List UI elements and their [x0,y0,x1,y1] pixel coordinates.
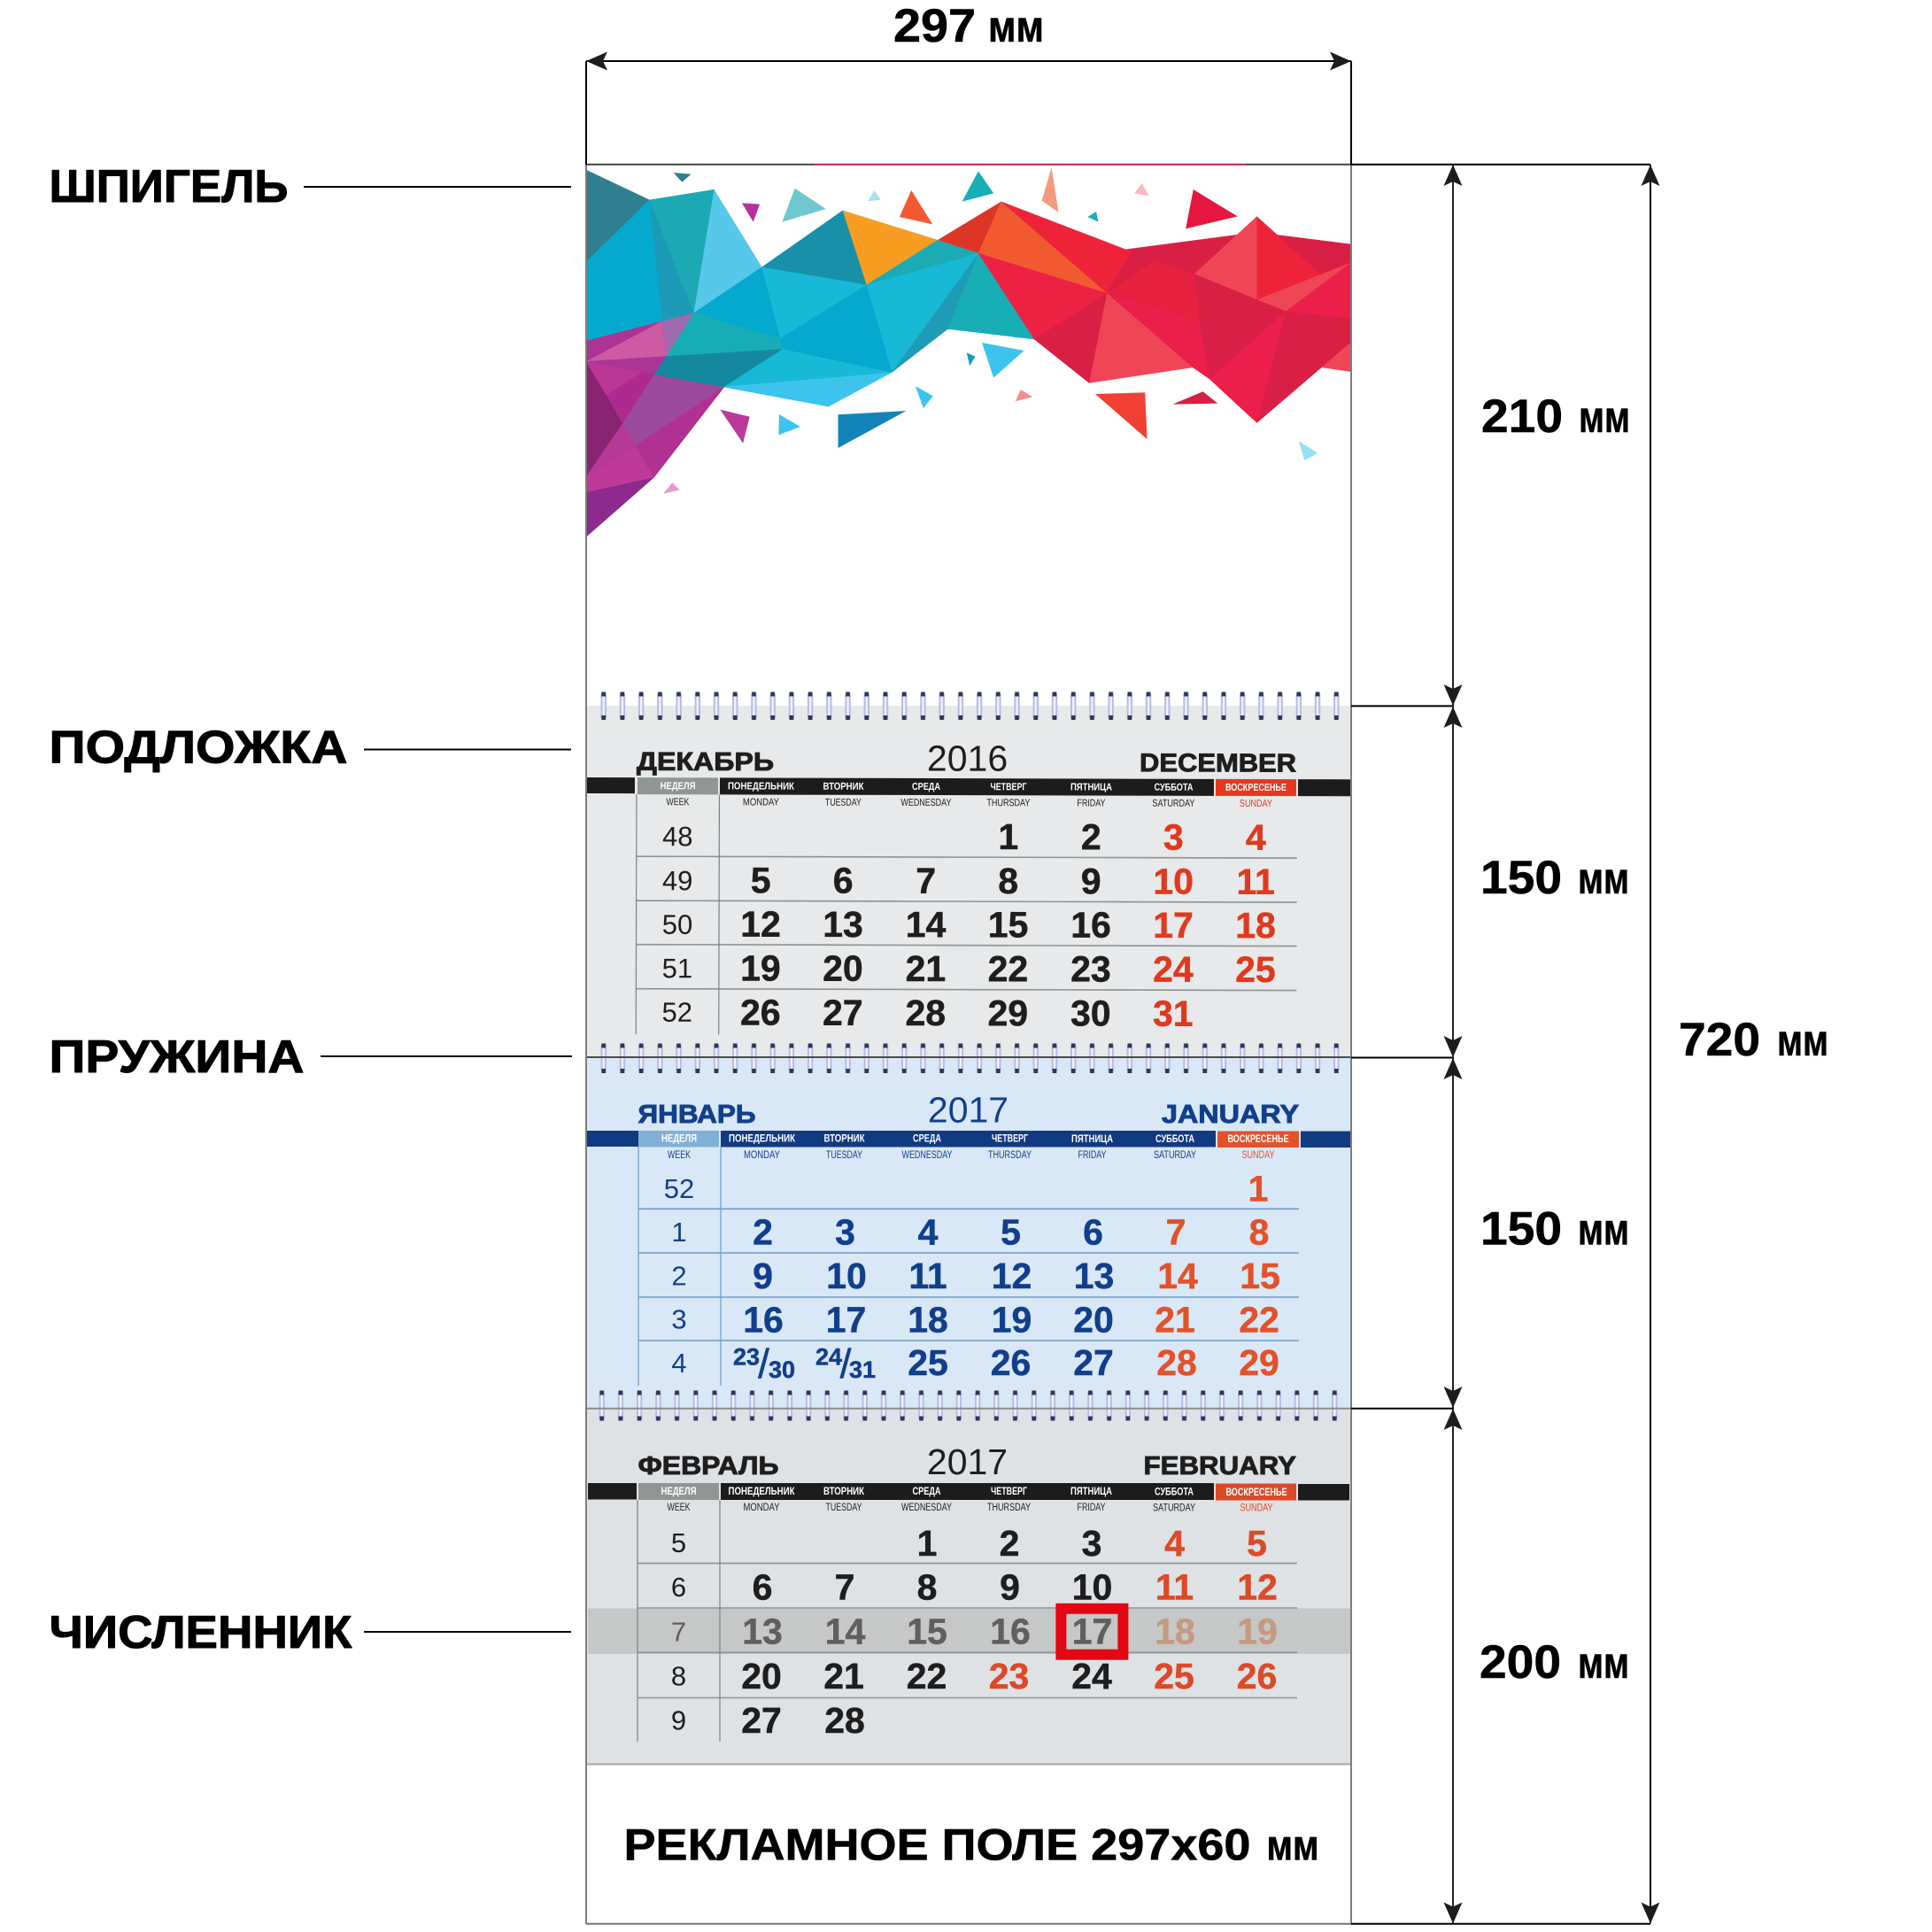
December content: 2 [1081,816,1101,857]
panel: February calendar [586,1409,1351,1766]
label: calendar block: ЧИСЛЕННИК [50,1607,352,1658]
panel: January calendar: ПОНЕДЕЛЬНИК [729,1133,796,1144]
panel: January calendar: 1 [1248,1169,1268,1209]
panel: January calendar: WEEK [668,1150,691,1161]
dimension arrow: 200 mm [1443,1409,1629,1923]
panel: February calendar: THURSDAY [987,1503,1031,1513]
December content: 6 [833,861,854,901]
panel: January calendar: / [840,1341,852,1387]
panel: January calendar: 22 [1239,1299,1279,1340]
December content: 2016 [927,738,1008,779]
December content: WEDNESDAY [900,798,952,808]
panel: January calendar: 6 [1083,1212,1103,1253]
spiral binding: bottom [592,1390,1345,1420]
label: spring: ПРУЖИНА [50,1032,305,1083]
panel: January calendar: ЯНВАРЬ [638,1101,756,1129]
panel: February calendar: ЧЕТВЕРГ [991,1487,1027,1497]
December content: ЧЕТВЕРГ [990,782,1027,792]
panel: February calendar: MONDAY [744,1503,780,1513]
spiral binding: top [594,692,1347,720]
December content: 23 [1070,948,1111,990]
panel: January calendar: 4 [671,1348,687,1379]
panel: February calendar: ПЯТНИЦА [1070,1487,1112,1497]
panel: January calendar: 24 [815,1344,842,1371]
dimension arrow: 200 mm: мм [1578,1638,1629,1688]
panel: January calendar: 18 [908,1299,948,1340]
December content: SUNDAY [1240,799,1272,809]
December content: 18 [1235,905,1276,946]
dimension arrow: 150 mm lower: 150 [1480,1202,1562,1256]
panel: January calendar: FRIDAY [1078,1150,1107,1161]
December content: 48 [662,821,693,852]
December content: 26 [740,992,781,1033]
panel: January calendar: JANUARY [1162,1101,1299,1129]
December content: 12 [740,904,781,945]
December content: 24 [1153,949,1194,990]
panel: February calendar: 5 [1247,1523,1267,1564]
panel: January calendar: WEDNESDAY [901,1150,953,1161]
December content: MONDAY [743,797,779,808]
panel: January calendar: 15 [1240,1256,1280,1296]
December content: 13 [823,904,863,945]
panel: February calendar: TUESDAY [825,1503,862,1513]
dimension arrow: 150 mm upper: мм [1578,854,1629,903]
panel: January calendar: 3 [671,1303,687,1335]
spiral binding: middle [594,1043,1347,1073]
label: spigel: ШПИГЕЛЬ [50,161,289,213]
panel: February calendar: 17 [1072,1611,1112,1652]
December content: 11 [1236,862,1275,902]
December content: SATURDAY [1152,799,1195,809]
panel: February calendar: ПОНЕДЕЛЬНИК [728,1487,795,1497]
panel: January calendar: 26 [991,1342,1031,1383]
December content: ПЯТНИЦА [1070,782,1112,793]
panel: February calendar: 21 [823,1656,864,1696]
December content: 3 [1163,817,1184,858]
panel: February calendar: ВТОРНИК [823,1487,865,1497]
December content: FRIDAY [1077,798,1106,809]
panel: January calendar: 14 [1157,1256,1198,1296]
dimension arrow: 720 mm total [1642,165,1828,1923]
dimension arrow: 210 mm: 210 [1481,390,1563,443]
December content: ВТОРНИК [823,782,864,792]
panel: February calendar: 10 [1072,1567,1112,1608]
panel: February calendar: 16 [990,1611,1031,1652]
December content: 31 [1153,993,1194,1034]
panel: February calendar: 3 [1082,1523,1101,1564]
right dimension tick lines [1351,165,1650,1924]
panel: January calendar: 30 [769,1356,795,1383]
panel: February calendar: 8 [671,1661,686,1691]
December content: 4 [1246,817,1266,858]
panel: February calendar: 6 [671,1572,686,1603]
panel: January calendar: ВОСКРЕСЕНЬЕ [1227,1134,1289,1145]
December content: 52 [662,997,692,1028]
December content: 8 [998,861,1018,901]
December content [585,738,1351,1036]
label: backing: ПОДЛОЖКА [50,723,347,774]
dimension arrow: 150 mm upper [1443,706,1629,1057]
December content: 50 [662,909,692,940]
dimension arrow: 200 mm: 200 [1480,1636,1561,1689]
top dimension: 297 mm [586,0,1351,165]
advertising field text: мм [1266,1822,1319,1870]
panel: February calendar: 24 [1071,1656,1112,1696]
December content: ДЕКАБРЬ [637,748,774,777]
dimension arrow: 720 mm total: мм [1777,1016,1828,1065]
dimension arrow: 150 mm lower [1443,1057,1629,1409]
December content: 1 [998,816,1018,857]
panel: January calendar: 17 [826,1299,866,1340]
panel: January calendar: MONDAY [744,1150,780,1161]
date marker: red frame on 17 [1061,1609,1123,1655]
panel: February calendar: FEBRUARY [1144,1452,1296,1480]
panel: January calendar: 52 [664,1173,694,1204]
panel: February calendar: 7 [671,1617,686,1647]
panel: January calendar: 4 [918,1212,939,1253]
December content: 27 [823,993,863,1033]
panel: January calendar: 8 [1249,1212,1269,1253]
December content: 17 [1153,905,1194,946]
panel: January calendar: НЕДЕЛЯ [661,1133,697,1144]
panel: January calendar: 16 [743,1299,784,1340]
panel: January calendar: TUESDAY [826,1150,862,1161]
panel: spigel header with polygon art [586,165,1351,706]
panel: February calendar: 15 [907,1611,947,1652]
dimension arrow: 720 mm total: 720 [1679,1014,1760,1066]
panel: January calendar: 29 [1239,1342,1279,1383]
panel: January calendar: ЧЕТВЕРГ [992,1133,1028,1144]
panel: January calendar: THURSDAY [988,1150,1032,1161]
panel: January calendar: 2 [671,1261,687,1291]
panel: February calendar: 20 [741,1656,782,1696]
top dimension: 297 mm: 297 [893,0,976,52]
panel: January calendar: 23 [733,1344,760,1371]
top dimension: 297 mm: мм [988,2,1044,51]
December content: 19 [740,947,781,989]
panel: January calendar: 12 [992,1256,1032,1296]
panel: January calendar: ПЯТНИЦА [1071,1134,1113,1145]
panel: February calendar: 27 [741,1700,782,1741]
panel: January calendar: 20 [1073,1299,1114,1340]
December content: 51 [662,953,692,984]
panel: February calendar: 6 [753,1567,772,1608]
panel: February calendar: 22 [907,1656,947,1696]
December content: 29 [987,993,1028,1033]
advertising field text: РЕКЛАМНОЕ ПОЛЕ 297х60 [623,1820,1250,1870]
panel: January calendar: ВТОРНИК [823,1133,865,1144]
panel: February calendar: 26 [1237,1656,1277,1696]
December content: 16 [1070,905,1111,946]
dimension arrow: 150 mm upper: 150 [1480,852,1562,904]
panel: January calendar: СРЕДА [913,1133,941,1144]
panel: February calendar: 8 [917,1567,937,1608]
panel: January calendar: 7 [1166,1212,1186,1253]
panel: February calendar: WEDNESDAY [901,1503,952,1513]
panel: January calendar: SATURDAY [1154,1150,1196,1161]
panel: February calendar: 2017 [927,1441,1008,1482]
panel: February calendar: 28 [824,1700,865,1741]
panel: February calendar: НЕДЕЛЯ [661,1487,696,1497]
December content: НЕДЕЛЯ [660,781,695,792]
panel: February calendar: 25 [1154,1656,1194,1696]
panel: February calendar: 19 [1237,1611,1278,1652]
December content: DECEMBER [1140,749,1296,778]
December content: WEEK [666,797,690,808]
December content: 28 [905,993,946,1033]
panel: February calendar: 2 [1000,1523,1019,1564]
panel: February calendar: ФЕВРАЛЬ [638,1452,779,1480]
dimension arrow: 210 mm: мм [1579,392,1630,442]
panel: February calendar: 12 [1237,1567,1278,1608]
panel: February calendar: 14 [825,1611,865,1652]
panel: January calendar [586,1057,1351,1409]
panel: January calendar: 31 [849,1356,876,1383]
December content: 15 [988,904,1028,946]
polygon artwork [586,167,1351,537]
panel: January calendar: 9 [753,1256,773,1296]
December content: 10 [1153,861,1194,902]
December content: TUESDAY [825,798,862,808]
panel: February calendar: СУББОТА [1155,1488,1194,1498]
panel: January calendar: 2017 [928,1089,1009,1130]
dimension arrow: 150 mm lower: мм [1578,1204,1629,1254]
December content: 21 [906,948,946,989]
panel: February calendar: 9 [671,1705,686,1735]
December content: 22 [988,948,1028,989]
December content: 30 [1070,993,1111,1034]
December content: 7 [916,861,936,901]
panel: February calendar: FRIDAY [1077,1503,1106,1513]
December content: СУББОТА [1154,783,1193,793]
panel: January calendar: 5 [1001,1212,1021,1253]
panel: January calendar: 1 [671,1217,687,1248]
panel: February calendar: ВОСКРЕСЕНЬЕ [1225,1488,1287,1498]
panel: December calendar [585,706,1351,1057]
panel: January calendar: 10 [826,1256,867,1296]
December content: ПОНЕДЕЛЬНИК [728,781,795,792]
December content: 14 [906,904,947,945]
panel: February calendar: SATURDAY [1153,1503,1195,1514]
December content: THURSDAY [986,798,1031,808]
panel: February calendar: 5 [671,1527,686,1558]
panel: January calendar: 2 [753,1212,773,1253]
panel: January calendar: SUNDAY [1241,1150,1275,1161]
panel: February calendar: SUNDAY [1240,1503,1273,1514]
dimension arrow: 210 mm [1443,165,1630,706]
panel: January calendar: 13 [1074,1256,1114,1296]
panel separators and outline [586,165,1351,1924]
panel: February calendar: 4 [1164,1523,1185,1564]
panel: January calendar: 3 [835,1212,855,1253]
panel: February calendar: СРЕДА [912,1487,940,1497]
panel: January calendar: 11 [908,1256,947,1296]
panel: February calendar: 13 [742,1611,783,1652]
December content: 49 [662,865,692,896]
panel: February calendar: 18 [1155,1611,1195,1652]
panel: February calendar: 7 [835,1567,854,1608]
panel: January calendar: / [758,1341,769,1387]
December content: ВОСКРЕСЕНЬЕ [1225,783,1287,793]
panel: February calendar: 1 [917,1523,937,1564]
panel: February calendar: WEEK [668,1503,691,1513]
December content: СРЕДА [912,782,940,792]
panel: January calendar: СУББОТА [1155,1134,1194,1145]
December content: 5 [751,860,771,900]
December content: 25 [1235,949,1276,990]
panel: February calendar: 23 [989,1656,1029,1696]
panel: January calendar: 21 [1155,1299,1195,1340]
December content: 9 [1081,861,1101,901]
panel: January calendar: 27 [1073,1342,1114,1383]
panel: February calendar: 11 [1155,1567,1194,1608]
panel: January calendar: 25 [908,1342,948,1383]
panel: January calendar: 19 [992,1299,1032,1340]
December content: 20 [823,948,863,989]
panel: February calendar: 9 [1000,1567,1020,1608]
panel: January calendar: 28 [1156,1342,1197,1383]
